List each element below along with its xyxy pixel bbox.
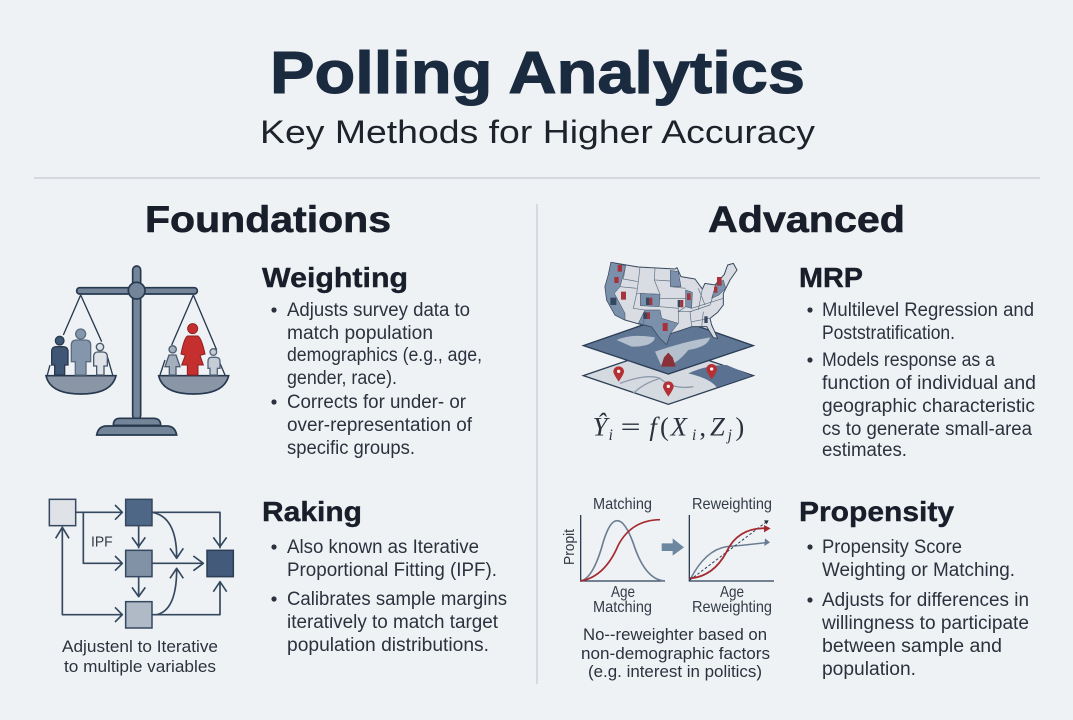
box: top square xyxy=(126,499,152,526)
text block: Weighting bullets: Corrects for under- or xyxy=(287,392,467,413)
chart labels: Age xyxy=(720,584,744,601)
diagram: raking flow xyxy=(49,499,233,628)
text block: Raking bullets xyxy=(271,537,507,656)
text block: Weighting bullets: demographics (e.g., age, xyxy=(287,345,482,366)
axis label: Propit: Propit xyxy=(562,529,578,565)
icon: pin xyxy=(613,366,624,382)
text block: Propensity bullets: between sample and xyxy=(822,636,1002,657)
markers: people xyxy=(614,265,722,331)
formula: f xyxy=(649,411,660,441)
text block: MRP bullets: Poststratification. xyxy=(822,323,955,344)
caption: propensity: No--reweighter based on xyxy=(583,625,767,644)
text block: Raking bullets: Calibrates sample margins xyxy=(287,589,507,610)
heading: Advanced: Advanced xyxy=(708,199,905,240)
chart labels: Reweighting xyxy=(692,599,772,616)
icon: person dark xyxy=(52,336,68,375)
arrow: matching to reweighting xyxy=(662,538,684,556)
text block: MRP bullets: Models response as a xyxy=(822,350,995,371)
formula: i xyxy=(692,427,696,444)
caption: propensity: (e.g. interest in politics) xyxy=(588,662,762,681)
box: target square xyxy=(207,550,233,577)
heading: Propensity: Propensity xyxy=(799,496,954,527)
icon: person light right xyxy=(208,349,220,375)
text block: Propensity bullets: willingness to participate xyxy=(821,613,1029,634)
chart labels: Reweighting xyxy=(692,496,772,513)
caption: raking: Adjustenl to Iterative xyxy=(62,637,218,656)
icon: balance scale xyxy=(46,266,229,435)
text block: MRP bullets: cs to generate small-area xyxy=(822,419,1032,440)
text block: MRP bullets: Multilevel Regression and xyxy=(822,300,1034,321)
caption: raking xyxy=(62,637,218,676)
chart labels: Matching xyxy=(593,599,652,616)
map: United States xyxy=(605,262,737,344)
formula xyxy=(593,411,744,444)
caption: propensity: non-demographic factors xyxy=(581,644,770,663)
states: shaded xyxy=(605,262,726,344)
layer: lower map plane xyxy=(583,347,753,404)
icon: person child left xyxy=(165,346,180,375)
layer: upper map plane xyxy=(583,316,753,374)
formula: ( xyxy=(660,411,669,441)
label: IPF: IPF xyxy=(91,535,113,551)
heading: Raking: Raking xyxy=(262,496,362,527)
caption: propensity xyxy=(581,625,770,681)
text block: Weighting bullets: gender, race). xyxy=(287,368,397,389)
chart labels: Age xyxy=(611,584,635,601)
chart: matching xyxy=(581,515,665,581)
text block: Weighting bullets xyxy=(271,300,482,459)
formula: j xyxy=(726,427,732,444)
text block: Raking bullets: population distributions. xyxy=(287,635,489,656)
formula: i xyxy=(609,427,613,444)
formula: ) xyxy=(735,411,744,441)
text block: Raking bullets: iteratively to match target xyxy=(287,612,499,633)
caption: raking: to multiple variables xyxy=(64,657,216,676)
text block: Propensity bullets: Weighting or Matching. xyxy=(822,560,1015,581)
box: light square xyxy=(49,499,76,526)
formula: = xyxy=(621,411,641,441)
chart: reweighting xyxy=(689,515,774,581)
subtitle: Key Methods for Higher Accuracy xyxy=(260,114,815,150)
text block: Raking bullets: Proportional Fitting (IPF). xyxy=(287,560,497,581)
text block: Propensity bullets xyxy=(807,537,1029,680)
text block: Propensity bullets: Adjusts for differences in xyxy=(822,590,1029,611)
text block: Weighting bullets: match population xyxy=(287,323,433,344)
text block: Propensity bullets: Propensity Score xyxy=(822,537,962,558)
chart labels: Matching xyxy=(593,496,652,513)
heading: Weighting: Weighting xyxy=(262,262,408,293)
title: Polling Analytics xyxy=(270,40,805,106)
text block: Propensity bullets: population. xyxy=(822,659,916,680)
text block: Weighting bullets: specific groups. xyxy=(287,438,415,459)
text block: Raking bullets: Also known as Iterative xyxy=(287,537,479,558)
planes xyxy=(583,316,753,404)
icon: pin xyxy=(706,364,717,379)
heading: MRP: MRP xyxy=(799,262,863,293)
text block: MRP bullets: function of individual and xyxy=(822,373,1036,394)
icon: person mid xyxy=(71,329,91,375)
text block: MRP bullets xyxy=(807,300,1036,461)
text block: MRP bullets: estimates. xyxy=(822,440,907,461)
charts: propensity curves xyxy=(562,515,774,581)
formula: X xyxy=(670,411,689,441)
box: middle square xyxy=(126,550,152,577)
icon: person light xyxy=(94,343,107,375)
icon: pin xyxy=(663,381,674,397)
heading: Foundations: Foundations xyxy=(145,199,391,240)
text block: MRP bullets: geographic characteristic xyxy=(822,396,1035,417)
text block: Weighting bullets: Adjusts survey data to xyxy=(287,300,470,321)
states: grid xyxy=(620,266,723,327)
chart labels xyxy=(593,496,772,616)
formula: Z xyxy=(710,411,726,441)
text block: Weighting bullets: over-representation of xyxy=(287,415,473,436)
formula: Ŷ xyxy=(593,411,611,441)
icon: person red xyxy=(181,324,205,375)
formula: , xyxy=(699,411,706,441)
illustration: layered US map xyxy=(583,262,753,444)
box: bottom square xyxy=(126,602,152,628)
